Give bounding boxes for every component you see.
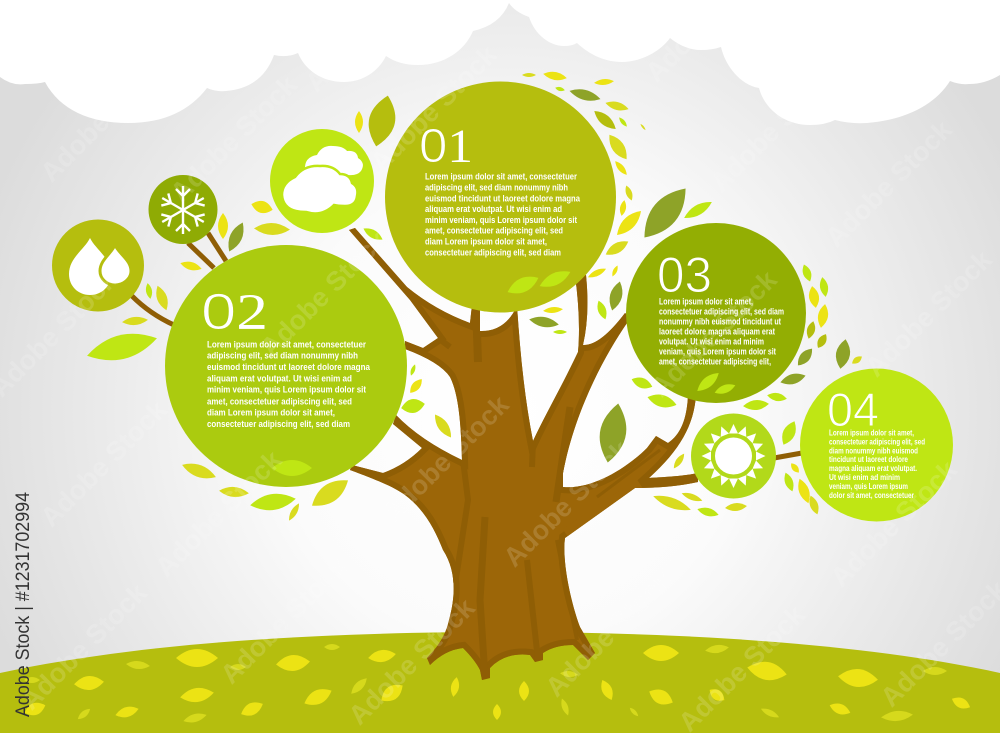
leaves around tree: [84, 70, 864, 522]
panel: circle 02: 02: [201, 283, 268, 341]
tree trunk: [349, 228, 698, 680]
watermark pattern: Adobe Stock: [35, 49, 173, 188]
panel: circle 02: adipiscing elit, sed diam nonummy nibh: [207, 351, 358, 362]
panel: circle 03: laoreet dolore magna aliquam erat: [659, 327, 775, 337]
panel: circle 02: consectetuer adipiscing elit, sed diam: [207, 419, 350, 430]
icon: clouds: [270, 129, 374, 233]
icon: sun: [691, 414, 776, 498]
watermark pattern: Adobe Stock: [215, 551, 353, 690]
panel: circle 03: amet, consectetuer adipiscing elit,: [659, 357, 771, 367]
watermark pattern: Adobe Stock: [705, 59, 843, 198]
panel: circle 03: volutpat. Ut wisi enim ad minim: [659, 337, 764, 347]
panel: circle 03: [626, 223, 806, 403]
watermark pattern: Adobe Stock: [365, 39, 503, 178]
panel: circle 03: consectetuer adipiscing elit, sed diam: [659, 307, 784, 317]
panel: circle 01: consectetuer adipiscing elit, sed diam: [425, 247, 561, 257]
watermark pattern: Adobe Stock: [343, 592, 481, 731]
ground hill: [0, 632, 1000, 733]
panel: circle 02: aliquam erat volutpat. Ut wisi enim ad: [207, 373, 352, 384]
panel: circle 02: minim veniam, quis Lorem ipsum dolor sit: [207, 385, 367, 396]
panel: circle 04: consectetuer adipiscing elit, sed: [829, 438, 925, 446]
panel: circle 04: diam nonummy nibh euismod: [829, 446, 918, 456]
watermark pattern: Adobe Stock: [820, 114, 958, 253]
fallen leaves on ground: [23, 643, 972, 725]
icon: snowflake: [148, 175, 218, 244]
watermark pattern: Adobe Stock: [15, 577, 153, 716]
watermark pattern: Adobe Stock: [255, 224, 393, 363]
panel: circle 03: nonummy nibh euismod tincidunt ut: [659, 317, 781, 327]
panel: circle 01: amet, consectetuer adipiscing elit, sed: [425, 226, 563, 236]
watermark pattern: Adobe Stock: [150, 444, 288, 583]
watermark pattern: Adobe Stock: [645, 264, 783, 403]
panel: circle 04: dolor sit amet, consectetuer: [829, 491, 914, 500]
watermark pattern: Adobe Stock: [498, 434, 636, 573]
watermark pattern: Adobe Stock: [860, 244, 998, 383]
panel: circle 01: aliquam erat volutpat. Ut wisi enim ad: [425, 204, 562, 214]
panel: circle 04: magna aliquam erat volutpat.: [829, 464, 917, 473]
panel: circle 04: veniam, quis Lorem ipsum: [829, 482, 908, 491]
panel: circle 01: diam Lorem ipsum dolor sit amet,: [425, 237, 547, 247]
panel: circle 03: Lorem ipsum dolor sit amet,: [659, 297, 753, 307]
panel: circle 03: 03: [657, 247, 712, 303]
panel: circle 04: 04: [827, 383, 879, 436]
panel: circle 01: euismod tincidunt ut laoreet dolore magna: [425, 193, 581, 203]
panel: circle 01: 01: [419, 120, 473, 173]
watermark pattern: Adobe Stock: [377, 389, 515, 528]
vertical stock id text: Adobe Stock | #1231702994: [13, 492, 34, 717]
watermark pattern: Adobe Stock: [35, 394, 173, 533]
icon: water drops: [52, 220, 144, 312]
panel: circle 01: adipiscing elit, sed diam nonummy nibh: [425, 182, 568, 192]
panel: circle 04: Lorem ipsum dolor sit amet,: [829, 428, 914, 438]
panel: circle 02: [165, 245, 407, 487]
thin branches: [132, 233, 802, 458]
panel: circle 01: minim veniam, quis Lorem ipsum dolor sit: [425, 215, 577, 225]
panel: circle 03: veniam, quis Lorem ipsum dolor sit: [659, 347, 776, 357]
panel: circle 02: euismod tincidunt ut laoreet dolore magna: [207, 362, 371, 373]
panel: circle 01: Lorem ipsum dolor sit amet, consectetuer: [425, 172, 577, 182]
watermark pattern: Adobe Stock: [540, 564, 678, 703]
panel: circle 02: diam Lorem ipsum dolor sit amet,: [207, 408, 335, 419]
panel: circle 02: amet, consectetuer adipiscing elit, sed: [207, 396, 352, 407]
panel: circle 04: tincidunt ut laoreet dolore: [829, 455, 908, 464]
panel: circle 02: Lorem ipsum dolor sit amet, consectetuer: [207, 339, 366, 350]
clouds: [0, 0, 1000, 125]
watermark pattern: Adobe Stock: [165, 69, 303, 208]
watermark pattern: Adobe Stock: [825, 454, 963, 593]
panel: circle 04: Ut wisi enim ad minim: [829, 473, 900, 482]
panel: circle 04: [800, 368, 953, 522]
panel: circle 01: [385, 82, 616, 312]
